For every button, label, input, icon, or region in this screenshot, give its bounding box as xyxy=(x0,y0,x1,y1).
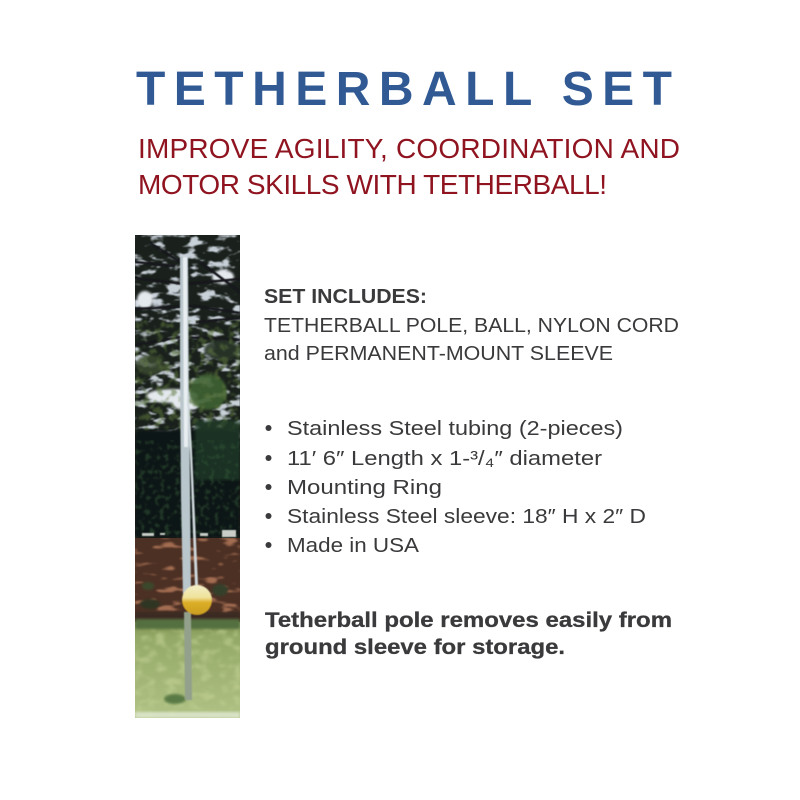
sky through pine branches xyxy=(135,235,240,440)
feature list: Stainless Steel sleeve: 18″ H x 2″ D xyxy=(287,506,646,528)
subtitle: MOTOR SKILLS WITH TETHERBALL! xyxy=(138,169,607,200)
set includes description: TETHERBALL POLE, BALL, NYLON CORD xyxy=(264,315,679,337)
grass xyxy=(135,622,240,718)
storage note: Tetherball pole removes easily from xyxy=(265,609,672,632)
white gravel edge xyxy=(142,530,236,537)
mulch xyxy=(135,538,240,622)
subtitle: IMPROVE AGILITY, COORDINATION AND xyxy=(138,133,680,164)
feature list: 11′ 6″ Length x 1-³/₄″ diameter xyxy=(287,448,602,470)
dark lower trees xyxy=(135,430,240,538)
feature list xyxy=(266,418,646,557)
subtitle xyxy=(138,133,680,200)
set includes heading: SET INCLUDES: xyxy=(264,286,427,308)
feature list: Made in USA xyxy=(287,535,420,557)
photo: tetherball pole outdoors xyxy=(135,235,240,718)
title: TETHERBALL SET xyxy=(136,63,680,116)
storage note xyxy=(265,609,672,659)
ball xyxy=(182,585,212,615)
feature list: Mounting Ring xyxy=(287,477,442,499)
pine foliage xyxy=(136,340,240,410)
storage note: ground sleeve for storage. xyxy=(265,636,565,659)
feature list: Stainless Steel tubing (2-pieces) xyxy=(287,418,623,440)
dark branches xyxy=(135,243,240,345)
set includes description: and PERMANENT-MOUNT SLEEVE xyxy=(264,343,613,365)
cord xyxy=(187,400,198,585)
set includes description xyxy=(264,315,679,365)
pole and ball xyxy=(180,257,212,700)
